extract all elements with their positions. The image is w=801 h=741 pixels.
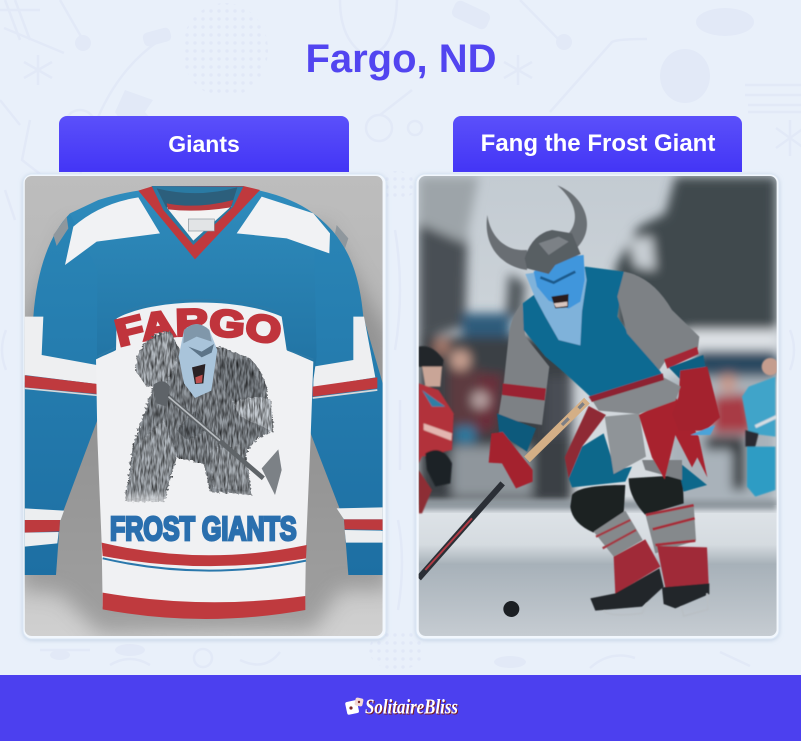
panel: Fang the Frost Giant mascot [416,116,779,639]
ice surface [419,505,777,637]
legs [570,485,625,533]
card frame [416,174,779,639]
blurred rink background [419,177,777,510]
heading tab: Giants [59,116,349,172]
card frame [23,174,386,639]
spectators in foreground [419,346,779,513]
beard [525,255,587,345]
heading tab: Fang the Frost Giant: Fang the Frost Giant [481,130,715,157]
footer band [0,675,801,741]
left glove [489,432,533,488]
SolitaireBliss logo [345,694,459,720]
jersey torso [53,191,348,619]
jersey shadow [20,227,390,633]
left sleeve [25,213,103,575]
face [534,255,585,309]
hockey stick [419,401,587,578]
FARGO lettering: FARGO [114,308,281,348]
socks [594,511,643,557]
horns [487,215,527,270]
skates [590,568,664,611]
logo wordmark: SolitaireBliss [365,694,458,718]
puck [503,601,519,617]
right sleeve [307,213,383,575]
icon: playing cards [345,697,364,715]
heading tab: Fang the Frost Giant [453,116,742,172]
shorts and skirt [569,433,632,487]
right arm [617,272,699,370]
right glove [672,367,720,431]
waist sash [590,377,681,414]
yeti illustration [123,324,282,507]
collar [138,186,260,259]
heading tab: Giants: Giants [168,131,240,157]
vest [523,267,664,397]
helmet [525,230,581,274]
FROST GIANTS lettering: FROST GIANTS [110,510,297,547]
jersey image [24,176,383,636]
mascot photo [419,176,779,637]
title: Fargo, ND [305,37,497,81]
left arm [498,303,549,425]
boots [614,539,660,594]
logo wordmark: SolitaireBliss [366,696,459,720]
panel: Giants jersey [21,116,388,642]
mascot figure [487,185,720,616]
